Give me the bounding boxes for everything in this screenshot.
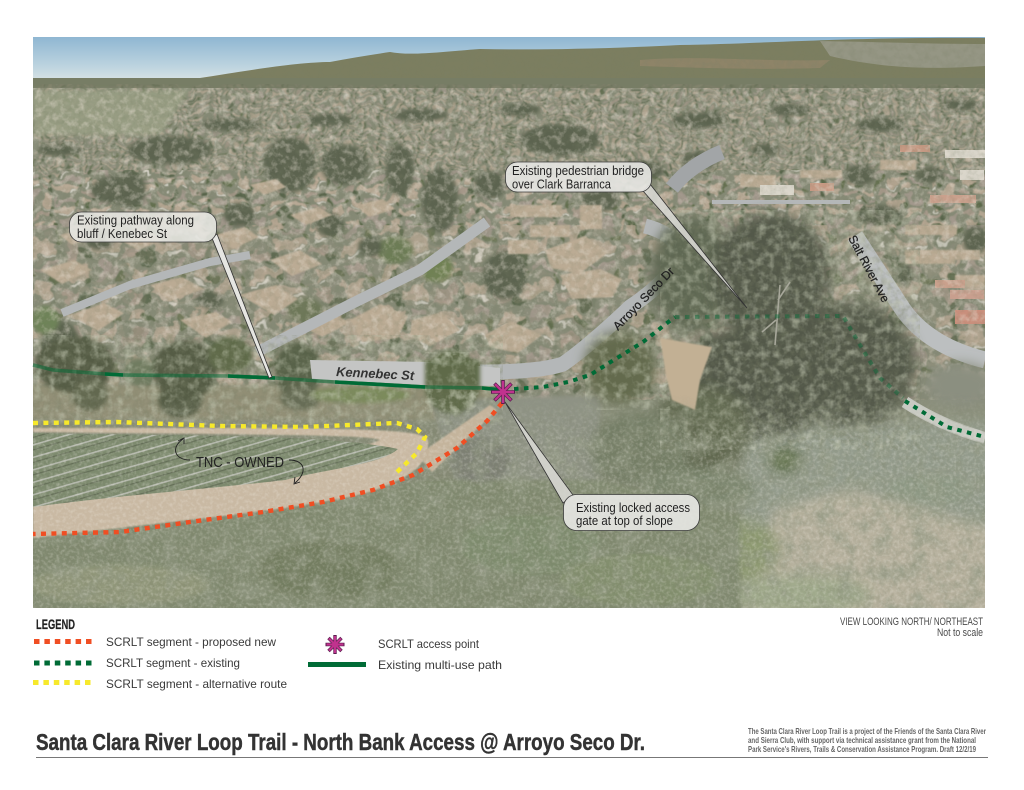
legend: existing: SCRLT segment - existing [106,656,240,670]
grain on the neighbourhoods [33,88,985,400]
sky [33,37,985,78]
icon: access point on map [491,380,515,404]
distant neighbourhoods [33,78,985,178]
middle neighbourhoods [23,170,995,400]
legend: multi-use path [308,658,502,672]
trail: proposed new segment [33,403,502,534]
callout: locked access gate: Existing locked access [576,501,690,515]
big dark tree mass [584,213,916,512]
white and red roofs on the right [760,145,985,324]
concrete path east of trees [905,402,985,438]
legend: multi-use path: Existing multi-use path [378,658,502,672]
callout: pedestrian bridge [506,162,747,308]
street: diagonal [257,222,487,352]
hills on the horizon [200,38,985,78]
road label: Kennebec St: Kennebec St [336,364,415,383]
dead tree [762,282,790,345]
arrow: to lower field [289,460,303,484]
street: upper centre [672,152,722,188]
credit note [748,726,986,754]
photo base [505,393,985,608]
street: Arroyo Seco Dr [480,226,678,372]
street: cross road [712,200,850,204]
callout: locked access gate [505,402,700,530]
callout: existing pathway: Existing pathway along [77,214,194,228]
legend: alternative route: SCRLT segment - alternative route [106,677,287,691]
streets [62,152,985,372]
scrub and rock on the right [740,356,985,608]
grain on the tree mass [585,210,920,450]
callout: existing pathway: bluff / Kenebec St [77,227,167,241]
bare soil slope [660,338,712,410]
title rule [36,757,988,758]
near trees along Kennebec St [35,337,480,418]
street: Salt River Ave [855,236,985,360]
rear bluff vegetation [33,384,598,478]
arrow: to upper field [176,438,190,460]
road label: Arroyo Seco Dr: Arroyo Seco Dr [610,264,677,333]
dark trees in the neighbourhood [31,100,987,369]
legend: access point: SCRLT access point [378,637,480,651]
label: TNC owned [176,438,303,484]
dirt road [33,428,428,538]
street: upper left [62,255,250,313]
panel: aerial photo [23,37,1000,630]
street: Kennebec St [310,352,500,412]
title: Santa Clara River Loop Trail - North Bank Access @ Arroyo Seco Dr. [36,729,645,755]
coarse mottling on foreground [33,385,985,608]
trail: alternative route [33,422,425,472]
grain on near trees [33,335,503,425]
photo light grain [33,385,985,608]
callout: pedestrian bridge: over Clark Barranca [512,178,611,192]
foreground vegetation [23,438,740,620]
label: TNC owned: TNC - OWNED [196,454,284,471]
trail: existing segment, east [514,316,985,437]
trail: existing multi-use path along Kennebec St [33,365,503,390]
view note: Not to scale [937,627,983,639]
house roofs near the road [40,160,985,353]
legend: proposed new: SCRLT segment - proposed new [106,635,276,649]
strawberry field [33,433,398,507]
road label: Salt River Ave: Salt River Ave [845,233,893,305]
legend: access point [326,635,480,654]
callout: existing pathway [70,212,272,378]
legend [33,616,502,691]
view note [840,616,983,639]
callout: pedestrian bridge: Existing pedestrian bridge [512,164,644,178]
concrete path, redrawn above mottling [905,402,985,438]
callout: locked access gate: gate at top of slope [576,514,673,528]
legend heading: LEGEND [36,616,75,632]
